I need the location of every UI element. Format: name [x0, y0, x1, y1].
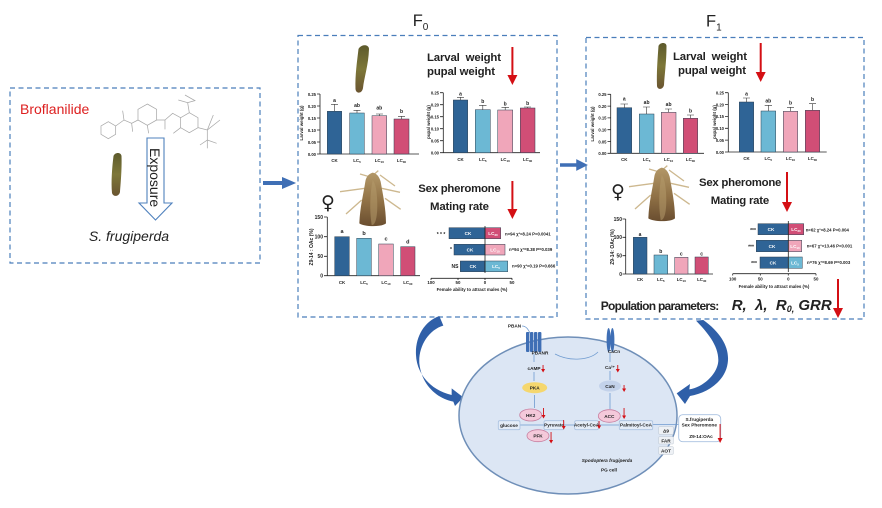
arrow: exposure: [139, 138, 172, 220]
chart: pupal weight F1: 0.10: [716, 126, 725, 131]
chart: pupal weight F0: 0.00: [431, 150, 440, 156]
label: PBAN: [508, 324, 530, 333]
chart: pupal weight F1: 10: [792, 158, 795, 162]
label: PBAN: PBAN: [508, 324, 522, 328]
chart: larval weight F1: 0.15: [598, 116, 607, 121]
chart: pupal weight F0: b: [504, 102, 507, 108]
enzyme: PKA: [522, 382, 547, 393]
text: sex pheromone and mating rate: Mating rate: [430, 201, 489, 213]
chart: pupal weight F0: a: [459, 92, 462, 98]
callout: sex pheromone: S.frugiperda: [685, 417, 713, 422]
chart: larval weight F1: 10: [670, 159, 674, 163]
chart: female ability F1: 10: [796, 246, 800, 250]
chart: pupal weight F1: LC: [808, 156, 814, 161]
heading: F0: 0: [423, 22, 429, 33]
chart: pupal weight F0: 0.05: [431, 138, 440, 144]
chart: larval weight F0: 30: [403, 160, 406, 164]
chart: Z9-14:OAc F1: c: [680, 252, 683, 258]
chart: pupal weight F0: LC: [501, 157, 506, 162]
icon: female symbol: ♀: [321, 192, 335, 214]
chart: female ability F1: n=76 χ²=8.69 P=0.003: [807, 260, 851, 265]
enzymes: Δ9 FAR AOT: FAR: [661, 438, 671, 443]
labels: cell name: PG cell: [601, 468, 617, 472]
chart: pupal weight F0: b: [481, 99, 484, 105]
chart: larval weight F0: 5: [359, 160, 361, 164]
chart: Z9-14:OAc F0: 10: [387, 282, 391, 286]
arrow: pheromone decrease: [507, 181, 517, 219]
icon: caterpillar: [657, 43, 666, 89]
enzyme: CaN: CaN: [605, 384, 615, 389]
chart: larval weight F0: 0.05: [308, 140, 317, 145]
chart: female ability F0: CK: [470, 264, 477, 269]
chart: female ability F0: LC: [490, 248, 496, 252]
chart: pupal weight F1: 0.05: [716, 138, 725, 143]
text: parameter symbols: R, λ, R: [732, 297, 787, 314]
chart: larval weight F1: 30: [692, 159, 695, 163]
chart: female ability F0: NS: [452, 264, 459, 270]
chart: pupal weight F1: 0.00: [716, 150, 725, 155]
text: larval and pupal weight: Larval weight: [673, 51, 747, 63]
chart: female ability F1: CK: [768, 227, 775, 232]
arrow: weight decrease: [507, 47, 517, 85]
enzyme: ACC: [598, 410, 620, 422]
labels: cell name: Spodoptera frugiperda: [582, 458, 633, 463]
arrow: exposure to F0: [263, 180, 291, 186]
heading: F0: F: [413, 12, 423, 30]
chart: pupal weight F0: 0.20: [431, 102, 440, 108]
chart: female ability F1: ***: [751, 261, 757, 267]
icon: caterpillar: [112, 153, 122, 196]
chart: larval weight F1: [590, 92, 704, 163]
chart: pupal weight F0: pupal weight (g): [426, 105, 431, 139]
label: Broflanilide: Broflanilide: [20, 101, 89, 117]
chart: pupal weight F0: LC: [523, 157, 529, 162]
chart: larval weight F1: CK: [621, 157, 628, 162]
arrow: F0 to cell: [416, 316, 463, 406]
enzyme: ACC: ACC: [604, 414, 615, 419]
text: sex pheromone and mating rate: Sex pheromone: [418, 183, 501, 195]
chart: Z9-14:OAc F0: 30: [409, 282, 413, 286]
chart: Z9-14:OAc F1: CK: [637, 277, 644, 282]
labels: receptors and messengers: [527, 349, 620, 371]
chart: female ability F1: n=62 χ²=8.24 P=0.004: [806, 228, 850, 232]
chart: larval weight F0: LC: [397, 158, 403, 163]
chart: pupal weight F0: 0.25: [431, 90, 440, 96]
diagram: PG cell pathway: [459, 324, 723, 494]
enzymes: Δ9 FAR AOT: [659, 427, 673, 454]
enzyme: PFK: PFK: [533, 434, 543, 439]
chart: larval weight F0: 10: [381, 160, 384, 164]
chart: Z9-14:OAc F1: 5: [663, 279, 665, 283]
chart: pupal weight F1: LC: [765, 156, 770, 161]
chart: Z9-14:OAc F1: c: [700, 252, 703, 258]
enzyme: CaN: [599, 380, 621, 392]
chart: female ability F0: 30: [494, 233, 498, 237]
panel: F0: [298, 36, 557, 317]
chart: female ability F0: n=94 χ²=8.24 P=0.0041: [505, 232, 551, 236]
chart: Z9-14:OAc F1: LC: [697, 277, 703, 282]
text: sex pheromone and mating rate: [699, 177, 781, 207]
chart: Z9-14:OAc F0: a: [340, 229, 344, 235]
chart: Z9-14:OAc F1: LC: [677, 277, 683, 282]
arrow: pheromone decrease: [782, 172, 792, 212]
chart: pupal weight F1: b: [789, 100, 792, 106]
chart: pupal weight F0: [426, 90, 540, 163]
pathway flow lines: [520, 352, 680, 425]
metabolite: Pyruvate: [544, 421, 564, 430]
chart: larval weight F0: a: [333, 98, 336, 104]
text: parameter symbols: GRR: [794, 297, 832, 314]
chart: Z9-14:OAc F0: LC: [381, 280, 387, 285]
chart: pupal weight F1: 5: [770, 158, 772, 162]
chart: pupal weight F1: ab: [765, 98, 771, 104]
chart: Z9-14:OAc F0: 50: [317, 254, 323, 260]
chart: larval weight F1: ab: [644, 100, 650, 106]
chart: Z9-14:OAc F0: 5: [366, 282, 368, 286]
chart: larval weight F1: 0.20: [598, 104, 607, 109]
chart: female ability F1: 50: [758, 276, 763, 282]
labels: receptors and messengers: PBANR: [532, 350, 549, 356]
chart: female ability F0: 0: [484, 280, 487, 285]
chart: larval weight F1: 0.25: [598, 92, 607, 97]
chart: Z9-14:OAc F0: c: [384, 236, 388, 242]
chart: larval weight F1: LC: [643, 157, 649, 162]
chart: Z9-14:OAc F0: LC: [403, 280, 409, 285]
chart: Z9-14:OAc F0: b: [362, 231, 366, 237]
chart: pupal weight F0: LC: [479, 157, 485, 162]
chart: pupal weight F1: pupal weight (g): [712, 105, 717, 139]
chart: larval weight F0: LC: [375, 158, 381, 163]
chart: pupal weight F1: a: [745, 91, 748, 97]
chart: Z9-14:OAc F0: CK: [339, 280, 346, 285]
chart: female ability F1: Female ability to attract males (%): [739, 284, 810, 289]
chart: pupal weight F1: LC: [786, 156, 792, 161]
chart: pupal weight F0: CK: [457, 157, 464, 162]
chart: pupal weight F1: [712, 90, 827, 162]
label: S. frugiperda: S. frugiperda: [89, 228, 169, 244]
chart: Z9-14:OAc F1: 100: [614, 235, 622, 241]
text: larval and pupal weight: [673, 51, 747, 77]
chart: Z9-14:OAc F0: d: [406, 240, 409, 246]
chart: female ability F0: 50: [456, 280, 461, 285]
small red decrease arrows: [541, 365, 723, 444]
chart: larval weight F0: ab: [354, 103, 360, 109]
metabolite: Acetyl-CoA: Acetyl-CoA: [574, 422, 600, 428]
chart: female ability F0: 50: [510, 280, 515, 285]
chart: Z9-14:OAc F0: 100: [315, 234, 323, 240]
chart: female ability F0: CK: [465, 231, 472, 236]
chart: Z9-14:OAc F1: 10: [683, 279, 686, 283]
text: sex pheromone and mating rate: [418, 183, 501, 213]
chart: Z9-14:OAc F1: b: [659, 249, 662, 255]
chart: female ability F1: LC: [791, 260, 797, 266]
text: larval and pupal weight: [427, 52, 501, 78]
chart: Z9-14:OAc F1: 0: [619, 272, 622, 278]
chart: pupal weight F1: 0.25: [716, 90, 725, 96]
text: sex pheromone and mating rate: Sex pheromone: [699, 177, 781, 189]
chart: Z9-14:OAc F0: 150: [315, 215, 323, 221]
chart: larval weight F1: ab: [666, 102, 672, 108]
chart: female ability F1: CK: [770, 260, 777, 266]
chart: female ability F0: 5: [498, 266, 500, 270]
icon: PBANR receptor: [526, 332, 541, 352]
chart: larval weight F1: 5: [649, 159, 651, 163]
chart: larval weight F1: LC: [686, 157, 692, 162]
chart: larval weight F0: CK: [331, 158, 338, 163]
chart: pupal weight F0: 30: [529, 159, 533, 163]
icon: moth: [340, 171, 401, 226]
chart: larval weight F0: 0.10: [308, 128, 317, 133]
chart: female ability F1: 50: [814, 276, 819, 282]
icon: female symbol: ♀: [611, 181, 625, 203]
chart: Z9-14:OAc F1: [610, 217, 713, 283]
icon: caterpillar: [355, 45, 369, 93]
labels: receptors and messengers: Ca²⁺: [605, 365, 616, 370]
icon: moth: [629, 166, 690, 221]
chart: larval weight F0: [299, 92, 419, 164]
chart: female ability F1: 100: [729, 276, 737, 282]
chart: larval weight F0: ab: [376, 106, 382, 112]
chart: larval weight F0: Larval weight (g): [299, 105, 304, 140]
chart: pupal weight F1: b: [811, 97, 814, 103]
chart: female ability F1: LC: [791, 227, 797, 232]
chart: larval weight F0: 0.20: [308, 104, 317, 109]
chart: larval weight F0: b: [400, 109, 403, 115]
enzyme: PKA: PKA: [530, 386, 540, 390]
chart: female ability F0: 100: [427, 280, 435, 285]
text: parameter symbols: 0,: [787, 304, 794, 314]
metabolite: Palmitoyl-CoA: [619, 421, 653, 430]
labels: receptors and messengers: CaCn: [608, 349, 620, 354]
chart: larval weight F1: Larval weight (g): [590, 106, 595, 141]
chart: larval weight F1: LC: [664, 157, 670, 162]
chart: larval weight F1: 0.00: [598, 151, 607, 156]
arrow: F0 to F1: [560, 162, 584, 168]
arrow: weight decrease: [756, 43, 766, 82]
chart: female ability F0: LC: [488, 231, 494, 236]
chart: pupal weight F0: 0.15: [431, 114, 440, 120]
heading: F1: 1: [716, 23, 722, 34]
chart: pupal weight F1: CK: [743, 156, 750, 161]
chart: larval weight F0: 0.00: [308, 152, 317, 157]
enzymes: Δ9 FAR AOT: Δ9: [663, 428, 669, 433]
chart: pupal weight F1: 30: [814, 158, 817, 162]
enzyme: HK2: [520, 409, 542, 421]
chart: female ability F1: n=67 χ²=13.46 P<0.001: [807, 244, 853, 248]
chart: Z9-14:OAc F1: a: [639, 232, 642, 238]
text: population parameters: Population parameters:: [601, 299, 719, 313]
chart: larval weight F1: 0.05: [598, 139, 607, 144]
chart: larval weight F0: LC: [353, 158, 359, 163]
labels: receptors and messengers: cAMP: [527, 366, 541, 371]
chart: Z9-14:OAc F1: 150: [614, 217, 622, 223]
metabolite: Acetyl-CoA: [574, 421, 600, 430]
labels: cell name: [582, 458, 633, 472]
chart: female ability F0: 10: [496, 250, 500, 254]
metabolite: glucose: glucose: [500, 423, 518, 428]
chart: Z9-14:OAc F1: 30: [703, 279, 707, 283]
chart: female ability F0: Female ability to attract males (%): [437, 287, 508, 292]
chart: female ability F1: 30: [797, 229, 801, 233]
arrow: exposure: Exposure: [147, 148, 163, 207]
chart: female ability F1: [729, 221, 853, 289]
chart: female ability F0: LC: [492, 264, 498, 269]
chart: pupal weight F0: 5: [485, 159, 487, 163]
chart: Z9-14:OAc F0: Z9-14 : OAc (%): [309, 228, 315, 265]
text: larval and pupal weight: pupal weight: [427, 66, 495, 78]
chart: larval weight F0: 0.15: [308, 116, 317, 121]
callout: sex pheromone: Z9-14:OAc: [689, 434, 713, 439]
chart: Z9-14:OAc F0: LC: [360, 280, 366, 285]
chart: Z9-14:OAc F1: Z9-14: OAc (%): [610, 229, 616, 265]
chart: female ability F0: CK: [467, 248, 474, 252]
panel: exposure: [10, 88, 260, 263]
chart: larval weight F0: 0.25: [308, 92, 317, 97]
chart: female ability F1: CK: [769, 244, 776, 249]
chart: female ability F1: ***: [748, 244, 754, 250]
chart: pupal weight F1: 0.20: [716, 102, 725, 107]
callout: sex pheromone: Sex Pheromone: [682, 422, 717, 428]
enzyme: HK2: HK2: [526, 413, 536, 418]
heading: F1: F: [706, 13, 716, 31]
enzymes: Δ9 FAR AOT: AOT: [661, 448, 671, 453]
chart: larval weight F1: a: [623, 96, 626, 102]
molecule: broflanilide structure: [101, 95, 220, 148]
chart: female ability F0: * * *: [437, 232, 445, 238]
chart: female ability F1: 5: [797, 262, 799, 266]
chart: female ability F1: LC: [790, 244, 796, 249]
callout: sex pheromone: [679, 415, 721, 442]
metabolite: glucose: [498, 421, 520, 430]
metabolite: Pyruvate: Pyruvate: [544, 422, 564, 428]
text: larval and pupal weight: Larval weight: [427, 52, 501, 64]
chart: pupal weight F0: 10: [506, 159, 510, 163]
chart: pupal weight F1: 0.15: [716, 114, 725, 119]
chart: female ability F0: *: [450, 247, 452, 253]
chart: female ability F1: ***: [750, 228, 756, 234]
chart: pupal weight F0: b: [526, 101, 529, 107]
chart: Z9-14:OAc F1: 50: [616, 254, 622, 260]
text: larval and pupal weight: pupal weight: [678, 65, 746, 77]
panel: F1: [586, 38, 864, 319]
chart: female ability F0: [427, 226, 556, 292]
chart: female ability F0: n=94 χ²=8.38 P=0.039: [509, 247, 553, 252]
arrow: F1 to cell: [677, 320, 728, 404]
chart: larval weight F1: 0.10: [598, 128, 607, 132]
metabolite: Palmitoyl-CoA: Palmitoyl-CoA: [620, 422, 653, 428]
chart: Z9-14:OAc F0: [309, 215, 420, 286]
chart: female ability F1: 0: [787, 276, 790, 282]
arrow: population decrease: [833, 279, 843, 318]
chart: Z9-14:OAc F1: LC: [657, 277, 663, 282]
chart: larval weight F1: b: [689, 108, 692, 114]
chart: female ability F0: n=90 χ²=0.19 P=0.666: [512, 264, 556, 268]
enzyme: PFK: [527, 430, 549, 442]
chart: Z9-14:OAc F0: 0: [320, 274, 323, 280]
text: sex pheromone and mating rate: Mating rate: [711, 195, 769, 207]
icon: CaCh channel: [607, 328, 614, 352]
chart: pupal weight F0: 0.10: [431, 126, 440, 132]
